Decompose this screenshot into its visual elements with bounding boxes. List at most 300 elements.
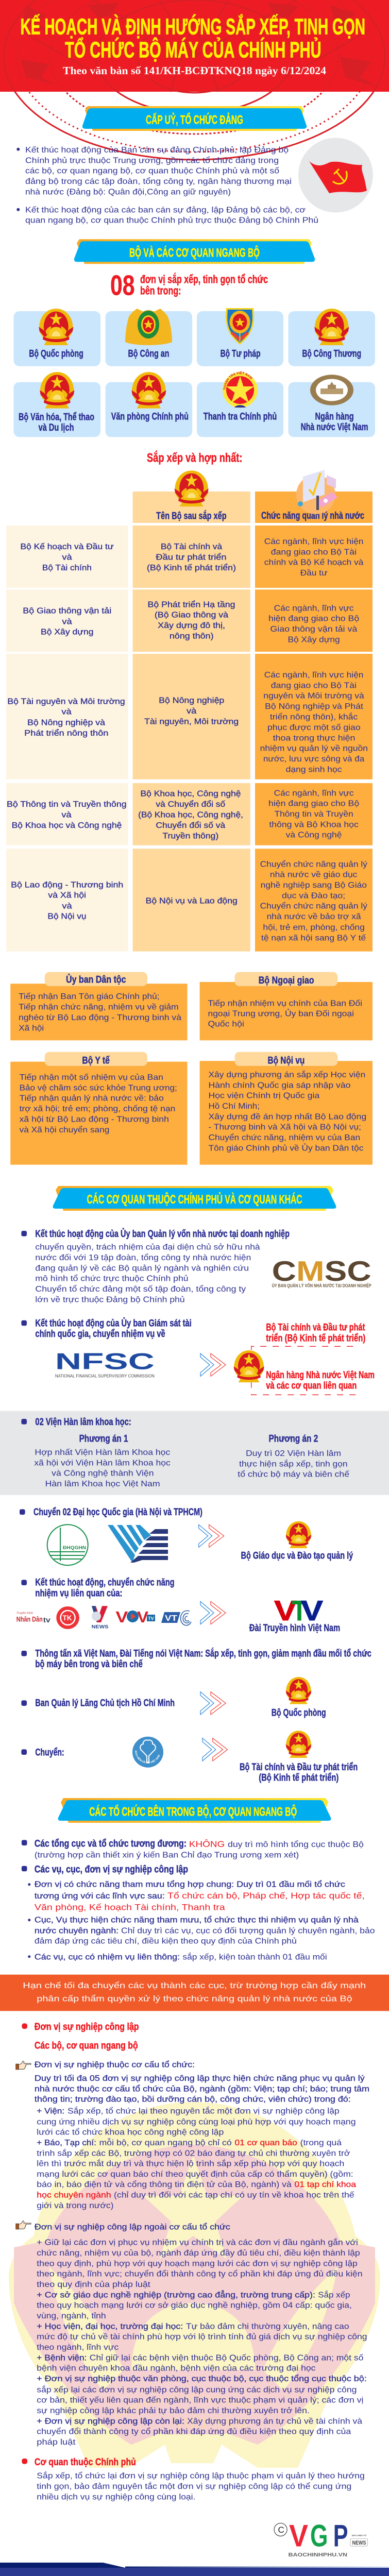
row 3: nhiệm vụ quản lý về nguồn <box>260 744 368 753</box>
item: ủy ban quản lý vốn: lớn về trực thuộc Đảng bộ Chính phủ <box>35 1295 185 1304</box>
panel: bộ công an: Bộ Công an <box>128 348 169 359</box>
logo: Nhân Dân TV <box>16 1612 50 1624</box>
watermark: national emblem: CỘNG HÒA XÃ HỘI CHỦ NGHĨA <box>114 2393 253 2418</box>
section ribbon: bộ và các cơ quan ngang bộ <box>74 239 315 264</box>
row 4: và Công nghệ <box>286 831 342 840</box>
phương án 1: Hợp nhất Viện Hàn lâm Khoa học <box>35 1448 170 1457</box>
panel: 02 viện hàn lâm khoa học: 02 Viện Hàn lâm khoa học: <box>35 1416 131 1428</box>
logo: VTC: VT <box>165 1614 177 1623</box>
item: thông tấn xã, đài tiếng nói: bộ máy bên trong và biên chế <box>35 1658 143 1670</box>
panel: bộ y tế: và Xã hội chuyển sang <box>20 1125 109 1134</box>
text block: đơn vị sự nghiệp công lập: thông tin; trường đào tạo, bồi dưỡng cán bộ, công chức, viên chức) trong đó: <box>35 2095 351 2104</box>
row 3: Bộ Tài nguyên và Môi trường <box>7 698 125 706</box>
panel: bộ y tế: Bộ Y tế <box>82 1055 110 1066</box>
logo: VGP news: P <box>333 2518 348 2553</box>
section ribbon: bộ và các cơ quan ngang bộ: BỘ VÀ CÁC CƠ QUAN NGANG BỘ <box>129 245 260 260</box>
text block: đơn vị sự nghiệp công lập: bệnh viện chuyên khoa đầu ngành, bệnh viện của các trường đại học <box>37 2364 316 2373</box>
text block: cơ quan thuộc chính phủ: Sắp xếp, tổ chức lại đơn vị sự nghiệp công lập thuộc phạm vi quản lý theo hướng <box>37 2471 365 2481</box>
text block: đơn vị sự nghiệp công lập: lưới các tổ chức khoa học công nghệ công lập <box>37 2128 224 2137</box>
logo: V News <box>92 1606 108 1630</box>
text block: đơn vị sự nghiệp công lập: Đơn vị sự nghiệp công lập <box>35 2021 139 2032</box>
icon: emblem <box>175 470 209 506</box>
panel: bộ y tế: trợ xã hội; trẻ em; phòng, chống tệ nạn <box>20 1105 175 1113</box>
icon: emblem <box>286 1521 311 1548</box>
text block: đơn vị sự nghiệp công lập: học chuyên ngành <box>37 2191 111 2200</box>
row 3: Bộ Nông nghiệp và Phát <box>265 702 364 711</box>
phương án 2: thực hiện sắp xếp, tinh gọn <box>239 1459 348 1468</box>
row 5: Chuyển chức năng quản lý <box>260 902 367 911</box>
row 3: Phát triển nông thôn <box>24 728 108 738</box>
row 1: và <box>62 553 72 562</box>
heading: 08 đơn vị: đơn vị sắp xếp, tinh gọn tổ chức <box>140 273 268 285</box>
item: ủy ban giám sát tài chính: Kết thúc hoạt động của Ủy ban Giám sát tài <box>35 1316 192 1329</box>
icon: emblem <box>131 372 166 409</box>
panel: thanh tra chính phủ: Thanh tra Chính phủ <box>204 411 277 422</box>
row 5: và Xã hội <box>48 891 86 900</box>
arrow <box>200 1692 226 1715</box>
logo: CMSC: CMSC <box>272 1255 371 1287</box>
target: bộ quốc phòng <box>272 1677 326 1719</box>
text block: đơn vị sự nghiệp công lập: báo in, báo điện tử và cổng thông tin điện tử của Bộ, ngành) và <box>37 2180 292 2189</box>
phương án 1 <box>34 1433 171 1488</box>
panel: bộ y tế <box>10 1052 187 1165</box>
watermark: national emblem: VIỆT NAM <box>174 2415 248 2432</box>
text block: đơn vị sự nghiệp công lập: Sắp xếp <box>318 2290 350 2299</box>
text block: tổng cục and vụ, cục rules: Tổ chức cán bộ, Pháp chế, Hợp tác quốc tế, <box>167 1891 365 1901</box>
text block: đơn vị sự nghiệp công lập: 01 tạp chí khoa <box>295 2180 356 2189</box>
text block: đơn vị sự nghiệp công lập: Đơn vị sự nghiệp thuộc cơ cấu tổ chức: <box>35 2060 195 2070</box>
text block: đơn vị sự nghiệp công lập: lên thì trước mắt duy trì và thực hiện lộ trình sắp xếp phù hợp với quy hoạch <box>37 2159 344 2168</box>
logo: VGP news <box>274 2518 368 2558</box>
text block: đơn vị sự nghiệp công lập: (trong quá <box>300 2139 342 2147</box>
phương án 2: Phương án 2 <box>269 1433 318 1444</box>
panel: ủy ban dân tộc: Ủy ban Dân tộc <box>66 973 126 985</box>
text block: đơn vị sự nghiệp công lập: Tự bảo đảm chi thường xuyên, nâng cao <box>186 2322 349 2331</box>
row 3: Bộ Nông nghiệp và <box>27 718 105 727</box>
text block: đơn vị sự nghiệp công lập: pháp luật <box>37 2438 76 2447</box>
panel: ngân hàng nhà nước việt nam: Ngân hàng <box>315 411 354 422</box>
text block: tổng cục and vụ, cục rules: Các tổng cục và tổ chức tương đương: <box>35 1838 187 1849</box>
text block: đơn vị sự nghiệp công lập: + Viện: <box>37 2107 64 2116</box>
icon: party flag <box>298 138 373 212</box>
text block: tổng cục and vụ, cục rules: duy trì mô hình tổng cục thuộc Bộ <box>228 1840 364 1849</box>
panel: 02 viện hàn lâm khoa học <box>0 1411 389 1495</box>
icon: justice shield <box>226 308 254 345</box>
text block: đơn vị sự nghiệp công lập: Sắp xếp, tổ chức lại theo nguyên tắc một đơn vị sự nghiệp công lập <box>67 2106 340 2116</box>
text block: đơn vị sự nghiệp công lập <box>15 2021 369 2447</box>
icon: emblem <box>314 309 349 345</box>
text block: đơn vị sự nghiệp công lập: mạng lưới các cơ quan báo chí theo quyết định của cấp có thẩm quyền) (gồm: <box>37 2170 353 2179</box>
row 2: (Bộ Giao thông và <box>155 611 228 620</box>
text block: đơn vị sự nghiệp công lập: chức năng, nhiệm vụ của bộ, ngành đáp ứng đầy đủ tiêu chí, điều kiện thành lập <box>37 2249 360 2258</box>
panel: bộ ngoại giao: ngoại Trung ương, Ủy ban Đối ngoại <box>208 1009 354 1019</box>
text block: tổng cục and vụ, cục rules: KHÔNG <box>189 1839 225 1849</box>
row 4: hiện đang giao cho Bộ <box>268 800 359 808</box>
item: ủy ban giám sát tài chính: chính quốc gia, chuyển nhiệm vụ về <box>35 1328 165 1340</box>
panel: bộ nội vụ: Xây dựng phương án sắp xếp Học viện <box>208 1070 365 1079</box>
icon: emblem <box>234 1350 264 1382</box>
item: kết thúc hoạt động truyền hình: Kết thúc hoạt động, chuyển chức năng <box>35 1577 175 1588</box>
row 3: phục được một số giao <box>267 723 361 732</box>
text block: đơn vị sự nghiệp công lập: Các bộ, cơ quan ngang bộ <box>35 2040 138 2052</box>
row 4: Thông tin và Truyền <box>274 810 353 819</box>
text block: tổng cục and vụ, cục rules: Đơn vị có chức năng tham mưu tổng hợp chung: Duy trì 01 đầu mối tổ chức <box>35 1880 345 1889</box>
text block: đơn vị sự nghiệp công lập: theo ngành, lĩnh vực <box>37 2343 119 2352</box>
target: bộ quốc phòng: Bộ Quốc phòng <box>272 1707 326 1719</box>
panel: văn phòng chính phủ: Văn phòng Chính phủ <box>111 411 189 422</box>
transfer targets: và các cơ quan liên quan <box>266 1380 357 1392</box>
logo: VGP news: NEWS <box>352 2540 366 2546</box>
panel: bộ nội vụ: Hồ Chí Minh; <box>208 1102 260 1111</box>
phương án 2: Duy trì 02 Viện Hàn lâm <box>246 1449 341 1458</box>
text block: đơn vị sự nghiệp công lập: nhà nước thuộc cơ cấu tổ chức của Bộ, ngành (gồm: Viện; tạp chí; báo; trung tâm <box>35 2084 369 2093</box>
text block: party organisation bullets: nhà nước (Đảng bộ: Quân đội,Công an giữ nguyên) <box>25 188 231 197</box>
section ribbon: cấp uỷ, tổ chức đảng: CẤP UỶ, TỔ CHỨC ĐẢNG <box>146 112 243 127</box>
text block: tổng cục and vụ, cục rules: Văn phòng, Kế hoạch Tài chính, Thanh tra <box>35 1903 226 1912</box>
icon: computer illustration <box>296 470 337 514</box>
logo: VGP news: BÁO ĐIỆN TỬ <box>352 2534 367 2537</box>
panel: thanh tra chính phủ <box>197 371 283 437</box>
row 1: Đầu tư phát triển <box>156 553 227 562</box>
text block: party organisation bullets: các bộ, cơ quan ngang bộ, cơ quan thuộc Chính phủ và một số <box>25 167 279 176</box>
row 5: Bộ Lao động - Thương binh <box>11 880 123 889</box>
panel: ủy ban dân tộc: Tiếp nhận chức năng, nhiệm vụ về giảm <box>19 1003 179 1011</box>
text block: đơn vị sự nghiệp công lập: theo quy định, phù hợp với quy hoạch mạng lưới các đơn vị sự nghiệp công lập <box>37 2259 358 2268</box>
row 3: và <box>61 708 72 717</box>
text block: cơ quan thuộc chính phủ: nhiều dịch vụ sự nghiệp công cùng loại. <box>37 2493 195 2501</box>
text block: đơn vị sự nghiệp công lập: + Đơn vị sự nghiệp thuộc văn phòng, cục thuộc bộ, cục thuộc tổng cục thuộc bộ: <box>37 2374 367 2383</box>
text block: đơn vị sự nghiệp công lập: sắp xếp lại các đơn vị sự nghiệp công lập cung ứng các dịch vụ sự nghiệp công <box>37 2384 357 2394</box>
row 2: Bộ Phát triển Hạ tầng <box>147 600 235 609</box>
item: ủy ban quản lý vốn: chuyển quyền, trách nhiệm của đại diện chủ sở hữu nhà <box>35 1243 260 1252</box>
merge table <box>6 470 373 952</box>
logo: ĐHQGHN <box>47 1524 88 1565</box>
icon: inspectorate badge: THANH TRA VIỆT NAM <box>224 371 252 390</box>
arrow <box>200 1601 226 1624</box>
row 2: Các ngành, lĩnh vực <box>274 604 354 613</box>
row 1 <box>6 526 373 588</box>
row 3: Bộ Nông nghiệp <box>159 696 224 705</box>
text block: tổng cục and vụ, cục rules: tương ứng với các lĩnh vực sau: <box>35 1892 165 1901</box>
row 2: Xây dựng đô thị, <box>158 621 225 630</box>
row 5: Bộ Nội vụ <box>47 912 87 921</box>
logo: NFSC: NATIONAL FINANCIAL SUPERVISORY COMMISSION <box>55 1374 155 1378</box>
row 4: Bộ Khoa học và Công nghệ <box>12 821 122 830</box>
logo: V News: NEWS <box>92 1624 108 1630</box>
text block: đơn vị sự nghiệp công lập: Duy trì tối đa 05 đơn vị sự nghiệp công lập thực hiện chức năng phục vụ quản lý <box>35 2074 365 2083</box>
logo: VOV TV: TV <box>148 1616 154 1621</box>
panel: bộ công an <box>106 309 192 366</box>
text block: đơn vị sự nghiệp công lập: theo quy định của pháp luật <box>37 2280 150 2289</box>
text block: đơn vị sự nghiệp công lập: + Giữ lại các đơn vị phục vụ nhiệm vụ chính trị và các đơn vị đầu ngành gắn với <box>37 2238 358 2247</box>
item: ủy ban quản lý vốn: nước đối với 19 tập đoàn, tổng công ty nhà nước hiện <box>35 1253 251 1262</box>
row 4 <box>6 783 373 845</box>
text block: đơn vị sự nghiệp công lập: Xây dựng phương án tự chủ về tài chính và <box>187 2417 362 2426</box>
text block: đơn vị sự nghiệp công lập: theo ngành, lĩnh vực; chuyển đổi thành công ty cổ phần khi đáp ứng đủ điều kiện <box>37 2269 363 2279</box>
text block: tổng cục and vụ, cục rules: Các vụ, cục, đơn vị sự nghiệp công lập <box>35 1863 188 1875</box>
logo: bảo hiểm xã hội: BẢO HIỂM XÃ HỘI VIỆT NAM <box>135 1751 160 1764</box>
phương án 1: Phương án 1 <box>79 1433 128 1444</box>
arrow <box>200 1353 226 1376</box>
text block: đơn vị sự nghiệp công lập: giới và trong nước) <box>37 2201 113 2210</box>
text block: tổng cục and vụ, cục rules: Chỉ duy trì các vụ, cục có đối tượng quản lý chuyên ngành, bảo <box>121 1926 375 1935</box>
panel: bộ văn hóa, thể thao và du lịch: và Du lịch <box>39 422 74 433</box>
row 4: và <box>61 811 72 820</box>
footer bar <box>0 2563 389 2576</box>
text block: đơn vị sự nghiệp công lập: + Đơn vị sự nghiệp công lập còn lại: <box>37 2417 184 2426</box>
text block: đơn vị sự nghiệp công lập: chuyển đổi thành công ty cổ phần khi đáp ứng đủ điều kiện theo quy định của <box>37 2427 351 2436</box>
logo: ĐHQGHN: ĐHQGHN <box>63 1545 86 1550</box>
heading: 08 đơn vị <box>110 269 268 301</box>
row 2: nông thôn) <box>170 632 214 640</box>
panel: ủy ban dân tộc: Tiếp nhận Ban Tôn giáo Chính phủ; <box>19 992 160 1001</box>
item: thông tấn xã, đài tiếng nói <box>21 1647 371 1670</box>
panel: bộ ngoại giao: Quốc hội <box>208 1020 244 1029</box>
phương án 1: xã hội với Viện Hàn lâm Khoa học <box>34 1459 171 1467</box>
table header cells: Tên Bộ sau sắp xếp <box>156 510 227 522</box>
header banner <box>0 0 389 160</box>
phương án 2: tổ chức bộ máy và biên chế <box>238 1470 349 1479</box>
text block: tổng cục and vụ, cục rules: (trường hợp cần thiết xin ý kiến Ban Chỉ đạo Trung ương xem xét) <box>35 1851 299 1859</box>
logo: Nhân Dân TV: Nhân Dân <box>16 1615 43 1623</box>
logo: VTC <box>161 1611 191 1625</box>
item: ban quản lý lăng <box>21 1698 175 1709</box>
row 1: chính và Bộ Kế hoạch và <box>264 558 364 567</box>
text block: đơn vị sự nghiệp công lập: cơ bản, thiết yếu liên quan đến ngành, lĩnh vực thuộc phạm vi quản lý; các đơn vị <box>37 2396 363 2405</box>
row 4: Chuyển đổi số và <box>156 821 225 830</box>
text block: party organisation bullets <box>16 146 318 225</box>
panel: bộ y tế: Tiếp nhận một số nhiệm vụ của Ban <box>20 1073 163 1082</box>
panel: bộ nội vụ: - Thương binh và Xã hội và Bộ Nội vụ; <box>208 1123 361 1132</box>
row 3: Các ngành, lĩnh vực hiện <box>264 671 363 680</box>
icon: emblem <box>286 1731 311 1758</box>
panel: bộ nội vụ: Bộ Nội vụ <box>268 1055 305 1066</box>
row 5: dục và Đào tạo; <box>282 891 345 900</box>
text block: tổng cục and vụ, cục rules: sắp xếp, kiện toàn thành 01 đầu mối <box>182 1952 327 1961</box>
target: bộ giáo dục và đào tạo: Bộ Giáo dục và Đào tạo quản lý <box>241 1550 353 1562</box>
logo: VGP news: G <box>310 2518 328 2553</box>
logo: VOV TV <box>115 1608 155 1626</box>
heading: 08 đơn vị: 08 <box>110 269 135 301</box>
row 3: dạng sinh học <box>286 765 342 774</box>
row 4: và Chuyển đổi số <box>156 800 225 809</box>
panel: bộ y tế: xã hội từ Bộ Lao động - Thương binh <box>20 1115 169 1124</box>
panel: ủy ban dân tộc <box>10 972 187 1040</box>
text block: cơ quan thuộc chính phủ: Cơ quan thuộc Chính phủ <box>35 2456 136 2468</box>
target: bộ giáo dục và đào tạo <box>241 1521 353 1562</box>
row 3: đang giao cho Bộ Tài <box>271 681 357 690</box>
row 3 <box>6 654 373 779</box>
arrow <box>199 1524 224 1547</box>
icon: emblem <box>40 372 74 409</box>
logo: VTV and label: Đài Truyền hình Việt Nam <box>249 1622 340 1634</box>
text block: đơn vị sự nghiệp công lập: trình sắp xếp các Bộ, trường hợp có 02 báo đang tự chủ chi thường xuyên trở <box>37 2148 350 2158</box>
text block: tổng cục and vụ, cục rules: Cục, Vụ thực hiện chức năng tham mưu, tổ chức thực thi nhiệm vụ quản lý nhà <box>35 1916 359 1925</box>
panel: văn phòng chính phủ <box>106 372 192 437</box>
row 5: nghề nghiệp sang Bộ Giáo <box>261 881 367 890</box>
item: chuyển: Chuyển: <box>35 1747 64 1758</box>
row 1: đang giao cho Bộ Tài <box>271 548 357 556</box>
logo: ĐHQG-HCM <box>108 1525 168 1563</box>
panel: bộ nội vụ: Tôn giáo Chính phủ về Ủy ban Dân tộc <box>208 1143 363 1153</box>
text block: party organisation bullets: Chính phủ trực thuộc Trung ương, gồm các tổ chức đảng trong <box>25 156 279 165</box>
panel: bộ quốc phòng: Bộ Quốc phòng <box>29 348 83 359</box>
text block: tổng cục and vụ, cục rules: Các vụ, cục có nhiệm vụ liên thông: <box>35 1953 180 1961</box>
logo: TK <box>56 1606 79 1629</box>
panel: ủy ban dân tộc: nghèo từ Bộ Lao động - Thương binh và <box>19 1013 181 1022</box>
arrow <box>202 1738 228 1761</box>
panel: bộ nội vụ <box>200 1052 373 1165</box>
icon: emblem <box>39 309 73 345</box>
logo: VTV and label: V <box>274 1595 297 1626</box>
row 3: và <box>187 707 196 716</box>
text block: đơn vị sự nghiệp công lập: + Báo, Tạp chí: <box>37 2139 96 2147</box>
panel: bộ nội vụ: Chuyển chức năng, nhiệm vụ của Ban <box>208 1133 360 1142</box>
subtitle: Theo văn bản số 141/KH-BCĐTKNQ18 ngày 6/12/2024 <box>63 64 327 77</box>
panel: bộ quốc phòng <box>13 309 100 366</box>
logo: VGP news: BAOCHINHPHU.VN <box>289 2552 347 2558</box>
panel: bộ ngoại giao <box>200 972 373 1040</box>
panel: bộ văn hóa, thể thao và du lịch: Bộ Văn hóa, Thể thao <box>19 411 94 422</box>
logo: VTV and label <box>249 1595 340 1634</box>
panel: bộ y tế: Tiếp nhận quản lý nhà nước về: bảo <box>20 1094 164 1103</box>
callout: hạn chế chuyển vụ thành cục <box>0 1975 389 2011</box>
text block: đơn vị sự nghiệp công lập: + Bệnh viện: <box>37 2353 87 2362</box>
panel: bộ tư pháp: Bộ Tư pháp <box>221 348 261 359</box>
target: bộ tài chính và đầu tư phát triển <box>240 1731 358 1783</box>
text block: đơn vị sự nghiệp công lập: 01 cơ quan báo <box>235 2139 297 2147</box>
row 3: Tài nguyên, Môi trường <box>144 717 239 726</box>
row 2: Bộ Xây dựng <box>287 635 340 644</box>
icon: state bank seal <box>310 375 353 405</box>
logo: VTV and label: V <box>301 1595 323 1626</box>
text block: tổng cục and vụ, cục rules <box>22 1838 375 1961</box>
row 2: Bộ Giao thông vận tải <box>23 607 111 616</box>
item: ủy ban giám sát tài chính <box>21 1316 192 1340</box>
icon: pointing hand <box>15 2221 31 2229</box>
row 3: triển nông thôn), khắc <box>270 712 358 722</box>
row 1: Bộ Tài chính và <box>161 543 222 551</box>
text block: đơn vị sự nghiệp công lập: mức độ tự chủ về tài chính phù hợp với lộ trình tính đủ giá dịch vụ sự nghiệp công <box>37 2333 367 2342</box>
title <box>21 14 365 63</box>
phương án 1: Hàn lâm Khoa học Việt Nam <box>45 1480 160 1488</box>
row 3: nước, lưu vực sông và đa <box>263 755 364 764</box>
icon: emblem <box>286 1677 311 1704</box>
text block: đơn vị sự nghiệp công lập: (chỉ duy trì đối với các tạp chí có uy tín về khoa học trên thế <box>114 2191 354 2200</box>
text block: cơ quan thuộc chính phủ: tinh gọn, bảo đảm nguyên tắc một đơn vị sự nghiệp công lập có thể cung ứng <box>37 2481 351 2491</box>
text block: đơn vị sự nghiệp công lập: theo quy hoạch mạng lưới cơ sở giáo dục nghề nghiệp, gồm 04 cấp: quốc gia, <box>37 2301 352 2310</box>
row 5 <box>6 849 373 952</box>
watermark: national emblem <box>9 2102 380 2468</box>
panel: bộ ngoại giao: Tiếp nhận nhiệm vụ chính của Ban Đối <box>208 999 362 1008</box>
panel: bộ y tế: Bảo vệ chăm sóc sức khỏe Trung ương; <box>20 1083 177 1092</box>
phương án 2 <box>238 1433 349 1479</box>
row 5: nhà nước về bảo trợ xã <box>267 912 361 921</box>
panel: ngân hàng nhà nước việt nam <box>289 375 375 437</box>
row 3: nguyên và Môi trường và <box>263 692 364 701</box>
text block: cơ quan thuộc chính phủ <box>22 2456 365 2501</box>
section ribbon: các cơ quan thuộc chính phủ <box>53 1186 336 1211</box>
logo: TK: TK <box>63 1614 72 1622</box>
section ribbon: các tổ chức bên trong bộ <box>58 1798 331 1823</box>
item: ủy ban quản lý vốn: Chuyển tổ chức đảng một số tập đoàn, tổng công ty <box>35 1284 246 1294</box>
logo: bảo hiểm xã hội <box>132 1736 163 1768</box>
icon: police badge <box>125 309 172 345</box>
logo: VGP news: V <box>289 2518 308 2553</box>
logo: VOV TV: V <box>137 1608 148 1626</box>
item: ủy ban quản lý vốn: mô hình tổ chức trực thuộc Chính phủ <box>35 1274 189 1283</box>
logo: VGP news: C <box>278 2525 284 2535</box>
row 2: Giao thông vận tải và <box>270 625 358 634</box>
transfer targets <box>234 1322 375 1395</box>
text block: đơn vị sự nghiệp công lập: cung ứng nhiều dịch vụ sự nghiệp công cùng loại phù hợp với quy hoạch mạng <box>37 2117 356 2126</box>
panel: bộ nội vụ: Xây dựng đề án hợp nhất Bộ Lao động <box>208 1112 366 1121</box>
text block: đơn vị sự nghiệp công lập: Đơn vị sự nghiệp công lập ngoài cơ cấu tổ chức <box>35 2222 230 2231</box>
text block: đơn vị sự nghiệp công lập: + Cơ sở giáo dục nghề nghiệp (trường cao đẳng, trường trung cấp): <box>37 2290 315 2299</box>
row 1: Bộ Kế hoạch và Đầu tư <box>21 543 114 551</box>
row 4: Truyền thông) <box>162 832 218 840</box>
text block: đơn vị sự nghiệp công lập: Chỉ giữ lại các bệnh viện thuộc Bộ Quốc phòng, Bộ Công an; một số <box>90 2353 364 2362</box>
item: ban quản lý lăng: Ban Quản lý Lăng Chủ tịch Hồ Chí Minh <box>35 1698 175 1709</box>
table header cells <box>133 492 373 523</box>
row 2: và <box>62 617 72 626</box>
row 1: Các ngành, lĩnh vực hiện <box>264 537 363 546</box>
item: ủy ban quản lý vốn <box>21 1227 290 1304</box>
text block: party organisation bullets: Kết thúc hoạt động của các ban cán sự đảng, lập Đảng bộ các bộ, cơ <box>25 206 306 214</box>
panel: bộ văn hóa, thể thao và du lịch <box>13 372 100 437</box>
row 4: Bộ Thông tin và Truyền thông <box>7 800 127 809</box>
logo: NFSC <box>55 1349 155 1378</box>
text block: đơn vị sự nghiệp công lập: sự nghiệp công lập khác phải tự bảo đảm chi thường xuyên trở lên. <box>37 2406 310 2415</box>
callout: hạn chế chuyển vụ thành cục: phân cấp thẩm quyền xử lý theo chức năng quản lý nhà nước của Bộ <box>37 1994 352 2003</box>
icon: inspectorate badge <box>223 371 258 408</box>
item: kết thúc hoạt động truyền hình: nhiệm vụ liên quan của: <box>35 1587 122 1599</box>
logo: Nhân Dân TV: Truyền hình <box>16 1612 33 1615</box>
row 5: hội, trẻ em, phòng, chống <box>263 923 365 932</box>
item: chuyển <box>21 1747 64 1758</box>
row 4: thông và Bộ Khoa học <box>269 820 359 829</box>
section ribbon: cấp uỷ, tổ chức đảng <box>82 106 307 131</box>
row 3: thoa trong thực hiện <box>273 734 356 742</box>
text block: party organisation bullets: quan ngang bộ, cơ quan thuộc Chính phủ trực thuộc Đảng bộ Chính Phủ <box>25 216 318 225</box>
item: chuyển 02 đại học quốc gia <box>20 1506 202 1518</box>
item: ủy ban quản lý vốn: đang quản lý về các Bộ quản lý ngành và nghiên cứu <box>35 1264 249 1273</box>
panel: bộ nội vụ: Học viện Chính trị Quốc gia <box>208 1092 319 1100</box>
row 2: hiện đang giao cho Bộ <box>268 615 359 623</box>
panel: bộ công thương: Bộ Công Thương <box>302 348 361 359</box>
panel: ủy ban dân tộc: Xã hội <box>19 1024 44 1032</box>
row 4: Bộ Khoa học, Công nghệ <box>140 790 241 799</box>
row 4: Các ngành, lĩnh vực <box>274 789 354 798</box>
panel: bộ tư pháp <box>197 308 283 366</box>
text block: đơn vị sự nghiệp công lập: + Học viện, đại học, trường đại học: <box>37 2322 183 2331</box>
row 5: nhà nước về giáo dục <box>270 871 357 879</box>
phương án 1: và Công nghệ thành Viện <box>52 1469 154 1478</box>
heading: 08 đơn vị: bên trong: <box>140 284 181 297</box>
text block: đơn vị sự nghiệp công lập: vùng, ngành, tỉnh <box>37 2312 106 2320</box>
row 5: tệ nạn xã hội sang Bộ Y tế <box>261 934 366 942</box>
row 2: Bộ Xây dựng <box>41 628 94 637</box>
panel: bộ ngoại giao: Bộ Ngoại giao <box>259 975 314 986</box>
target: bộ tài chính và đầu tư phát triển: (Bộ Kinh tế phát triển) <box>259 1772 339 1783</box>
row 1: (Bộ Kinh tế phát triển) <box>147 563 236 572</box>
row 5: Bộ Nội vụ và Lao động <box>146 897 238 906</box>
row 4: (Bộ Khoa học, Công nghệ, <box>138 811 243 820</box>
heading: sắp xếp và hợp nhất: Sắp xếp và hợp nhất: <box>147 451 242 465</box>
item: ủy ban quản lý vốn: Kết thúc hoạt động của Ủy ban Quản lý vốn nhà nước tại doanh nghiệp <box>35 1227 290 1240</box>
item: kết thúc hoạt động truyền hình <box>21 1577 175 1599</box>
text block: party organisation bullets: đảng bộ trong các tập đoàn, tổng công ty, ngân hàng thương mại <box>25 177 292 186</box>
